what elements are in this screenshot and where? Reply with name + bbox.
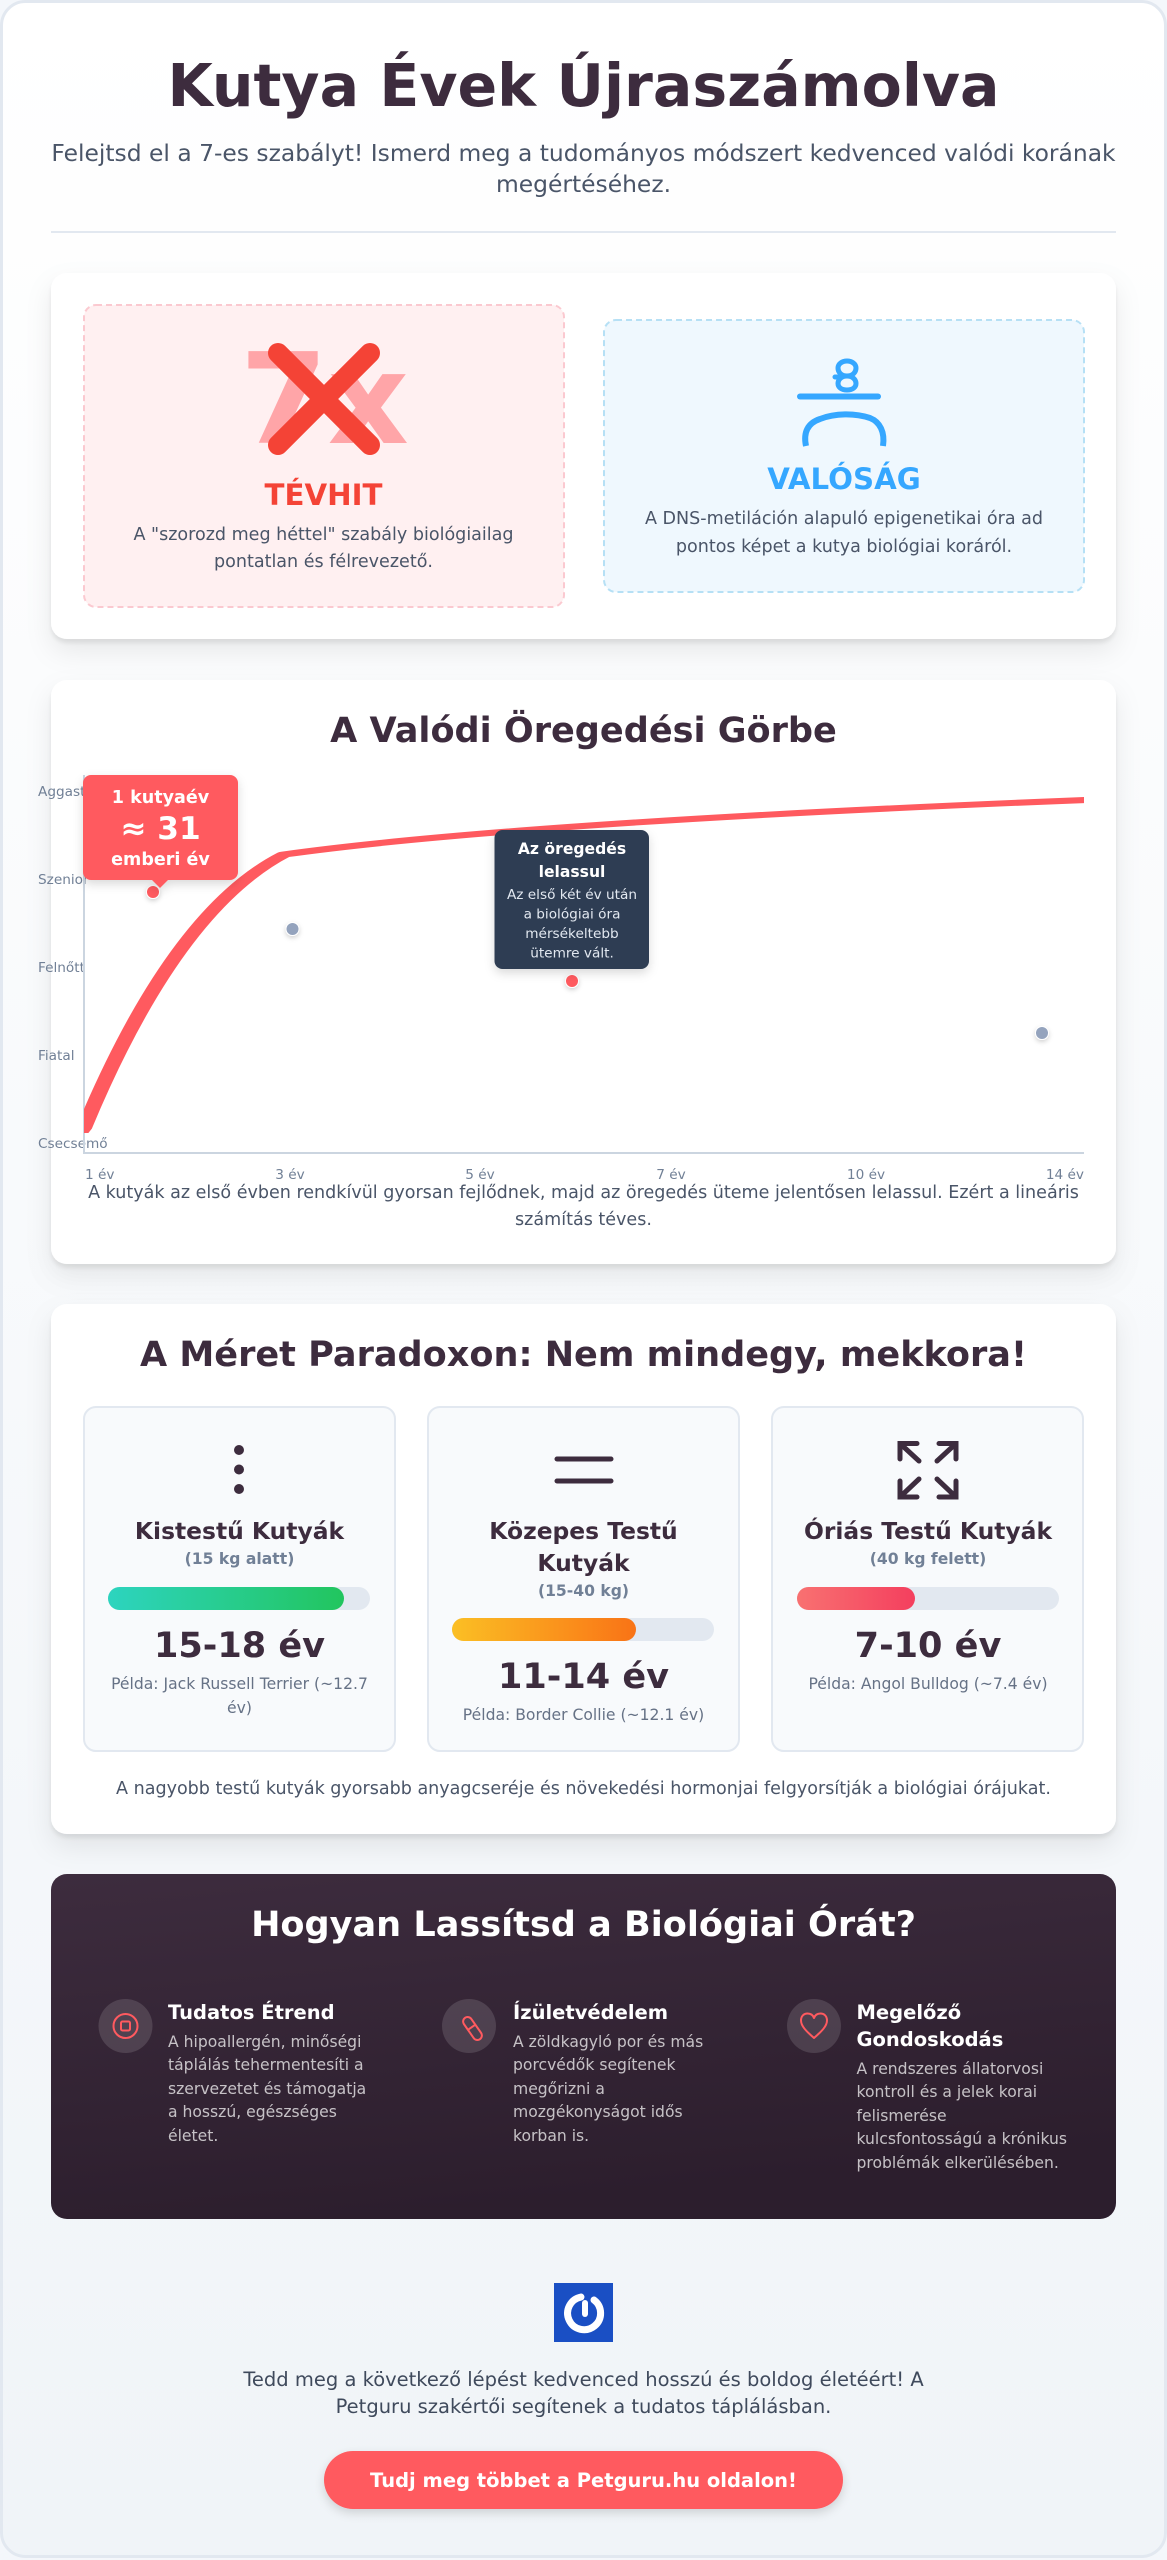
lifespan bar: giant bbox=[797, 1587, 1059, 1610]
callout: one dog year: 1 kutyaév bbox=[112, 788, 210, 808]
icon: two lines bbox=[557, 1459, 611, 1481]
tip: preventive care: problémák elkerülésében. bbox=[856, 2154, 1059, 2172]
data point: three years bbox=[286, 923, 298, 935]
icon: diet bbox=[98, 1999, 152, 2053]
tip: preventive care: kontroll és a jelek korai bbox=[856, 2083, 1037, 2101]
callout: aging slows: Az öregedés bbox=[518, 840, 626, 858]
tip: preventive care: kulcsfontosságú a krónikus bbox=[856, 2130, 1067, 2148]
chart caption: számítás téves. bbox=[515, 1210, 652, 1230]
data point: fourteen years bbox=[1036, 1027, 1048, 1039]
data point: year one bbox=[147, 886, 159, 898]
reality text: A DNS-metiláción alapuló epigenetikai óra ad bbox=[645, 509, 1043, 529]
tip: preventive care: Gondoskodás bbox=[856, 2028, 1003, 2051]
panel: aging curve bbox=[38, 680, 1116, 1264]
call to action text bbox=[242, 2368, 924, 2418]
tip: diet: a hosszú, egészséges bbox=[168, 2103, 337, 2121]
x axis labels: 7 év bbox=[656, 1167, 686, 1183]
aging curve line bbox=[76, 800, 1085, 1138]
tip: joints bbox=[442, 1999, 703, 2145]
button: Tudj meg többet a Petguru.hu oldalon! bbox=[370, 2469, 797, 2492]
x axis labels: 5 év bbox=[465, 1167, 495, 1183]
tip: preventive care: felismerése bbox=[856, 2107, 947, 2125]
x axis labels: 3 év bbox=[275, 1167, 305, 1183]
icon: four arrows bbox=[900, 1444, 956, 1497]
card: small dogs: 15-18 év bbox=[154, 1625, 325, 1666]
card: medium dogs: Közepes Testű bbox=[489, 1517, 678, 1545]
card: medium dogs: Példa: Border Collie (~12.1 év) bbox=[463, 1706, 704, 1724]
card: medium dogs: (15-40 kg) bbox=[538, 1582, 629, 1600]
tip: joints: Ízületvédelem bbox=[513, 2001, 668, 2024]
callout: aging slows bbox=[494, 830, 649, 969]
x axis labels: 10 év bbox=[847, 1167, 885, 1183]
y axis labels: Fiatal bbox=[38, 1048, 74, 1064]
card: medium dogs: 11-14 év bbox=[498, 1656, 669, 1697]
callout: one dog year: ≈ 31 bbox=[120, 811, 201, 847]
icon: DNA clock bbox=[800, 361, 883, 446]
reality text bbox=[645, 509, 1043, 557]
card: giant dogs: Óriás Testű Kutyák bbox=[804, 1517, 1052, 1545]
icon: three dots bbox=[234, 1445, 244, 1494]
tip: diet: életet. bbox=[168, 2127, 218, 2145]
reality heading: VALÓSÁG bbox=[767, 460, 921, 496]
tip: diet: táplálás tehermentesíti a bbox=[168, 2056, 364, 2074]
title: Kutya Évek Újraszámolva bbox=[168, 51, 999, 120]
tip: diet: szervezetet és támogatja bbox=[168, 2080, 366, 2098]
size note: A nagyobb testű kutyák gyorsabb anyagcseréje és növekedési hormonjai felgyorsítják a biológiai órájukat. bbox=[116, 1779, 1051, 1799]
card: small dogs: év) bbox=[227, 1699, 252, 1717]
card: giant dogs bbox=[772, 1407, 1083, 1751]
y axis labels bbox=[38, 784, 111, 1152]
myth text bbox=[133, 525, 514, 572]
card: small dogs bbox=[84, 1407, 395, 1751]
tip: diet: Tudatos Étrend bbox=[168, 2001, 335, 2024]
tip: preventive care: A rendszeres állatorvosi bbox=[856, 2060, 1043, 2078]
x axis labels bbox=[85, 1167, 1084, 1183]
logo: Petguru bbox=[554, 2283, 613, 2342]
card: giant dogs: Példa: Angol Bulldog (~7.4 év) bbox=[808, 1675, 1048, 1693]
subtitle: Felejtsd el a 7-es szabályt! Ismerd meg a tudományos módszert kedvenced valódi korának bbox=[51, 139, 1116, 167]
card: small dogs: Kistestű Kutyák bbox=[135, 1517, 345, 1545]
card: giant dogs: (40 kg felett) bbox=[870, 1550, 986, 1568]
x axis labels: 1 év bbox=[85, 1167, 114, 1183]
panel: reality bbox=[604, 320, 1084, 592]
button bbox=[324, 2451, 843, 2509]
tip: joints: A zöldkagyló por és más bbox=[513, 2033, 703, 2051]
chart caption: A kutyák az első évben rendkívül gyorsan fejlődnek, majd az öregedés üteme jelentősen lelassul. Ezért a lineáris bbox=[88, 1183, 1079, 1203]
reality text: pontos képet a kutya biológiai koráról. bbox=[676, 537, 1012, 557]
tip: joints: mozgékonyságot idős bbox=[513, 2103, 683, 2121]
chart axes bbox=[84, 775, 1084, 1153]
tip: joints: korban is. bbox=[513, 2127, 589, 2145]
myth heading: TÉVHIT bbox=[265, 477, 382, 512]
subtitle: megértéséhez. bbox=[496, 170, 671, 198]
card: small dogs: Példa: Jack Russell Terrier (~12.7 bbox=[111, 1675, 368, 1693]
callout: aging slows: lelassul bbox=[539, 863, 605, 881]
icon: heart bbox=[787, 1999, 841, 2053]
heading: aging curve: A Valódi Öregedési Görbe bbox=[330, 709, 837, 751]
lifespan bar: medium bbox=[452, 1618, 714, 1641]
panel: slowing the clock bbox=[51, 1874, 1116, 2219]
heading: size paradox: A Méret Paradoxon: Nem mindegy, mekkora! bbox=[140, 1334, 1027, 1375]
tip: diet bbox=[98, 1999, 366, 2145]
tip: diet: A hipoallergén, minőségi bbox=[168, 2033, 361, 2051]
tip: preventive care: Megelőző bbox=[856, 2001, 961, 2024]
icon: crossed out 7x: 7x bbox=[240, 326, 409, 473]
card: small dogs: (15 kg alatt) bbox=[185, 1550, 294, 1568]
tip: preventive care bbox=[787, 1999, 1067, 2172]
card: giant dogs: 7-10 év bbox=[855, 1625, 1001, 1666]
panel: size paradox bbox=[51, 1304, 1116, 1834]
callout: one dog year bbox=[83, 775, 238, 888]
heading: slowing the clock: Hogyan Lassítsd a Biológiai Órát? bbox=[251, 1903, 916, 1945]
callout: aging slows: mérsékeltebb bbox=[525, 926, 619, 942]
card: medium dogs: Kutyák bbox=[537, 1549, 630, 1577]
y axis labels: Csecsemő bbox=[38, 1136, 108, 1152]
tip: joints: porcvédők segítenek bbox=[513, 2056, 676, 2074]
callout: aging slows: a biológiai óra bbox=[524, 906, 620, 922]
callout: aging slows: Az első két év után bbox=[507, 887, 637, 903]
lifespan bar: small bbox=[108, 1587, 370, 1610]
panel: myth bbox=[84, 305, 564, 607]
callout: one dog year: emberi év bbox=[111, 850, 210, 870]
subtitle bbox=[51, 139, 1116, 198]
y axis labels: Szenior bbox=[38, 872, 89, 888]
icon: capsule bbox=[442, 1999, 496, 2053]
panel: myth versus reality bbox=[51, 273, 1116, 639]
myth text: A "szorozd meg héttel" szabály biológiailag bbox=[133, 525, 514, 545]
y axis labels: Felnőtt bbox=[38, 960, 86, 976]
x axis labels: 14 év bbox=[1046, 1167, 1084, 1183]
card: medium dogs bbox=[428, 1407, 739, 1751]
callout: aging slows: ütemre vált. bbox=[530, 946, 614, 962]
call to action text: Tedd meg a következő lépést kedvenced hosszú és boldog életéért! A bbox=[242, 2368, 924, 2391]
call to action text: Petguru szakértői segítenek a tudatos táplálásban. bbox=[336, 2395, 831, 2418]
data point: six years bbox=[566, 975, 578, 987]
y axis labels: Aggastyán bbox=[38, 784, 111, 800]
myth text: pontatlan és félrevezető. bbox=[214, 552, 433, 572]
tip: joints: megőrizni a bbox=[513, 2080, 605, 2098]
chart caption bbox=[88, 1183, 1079, 1230]
